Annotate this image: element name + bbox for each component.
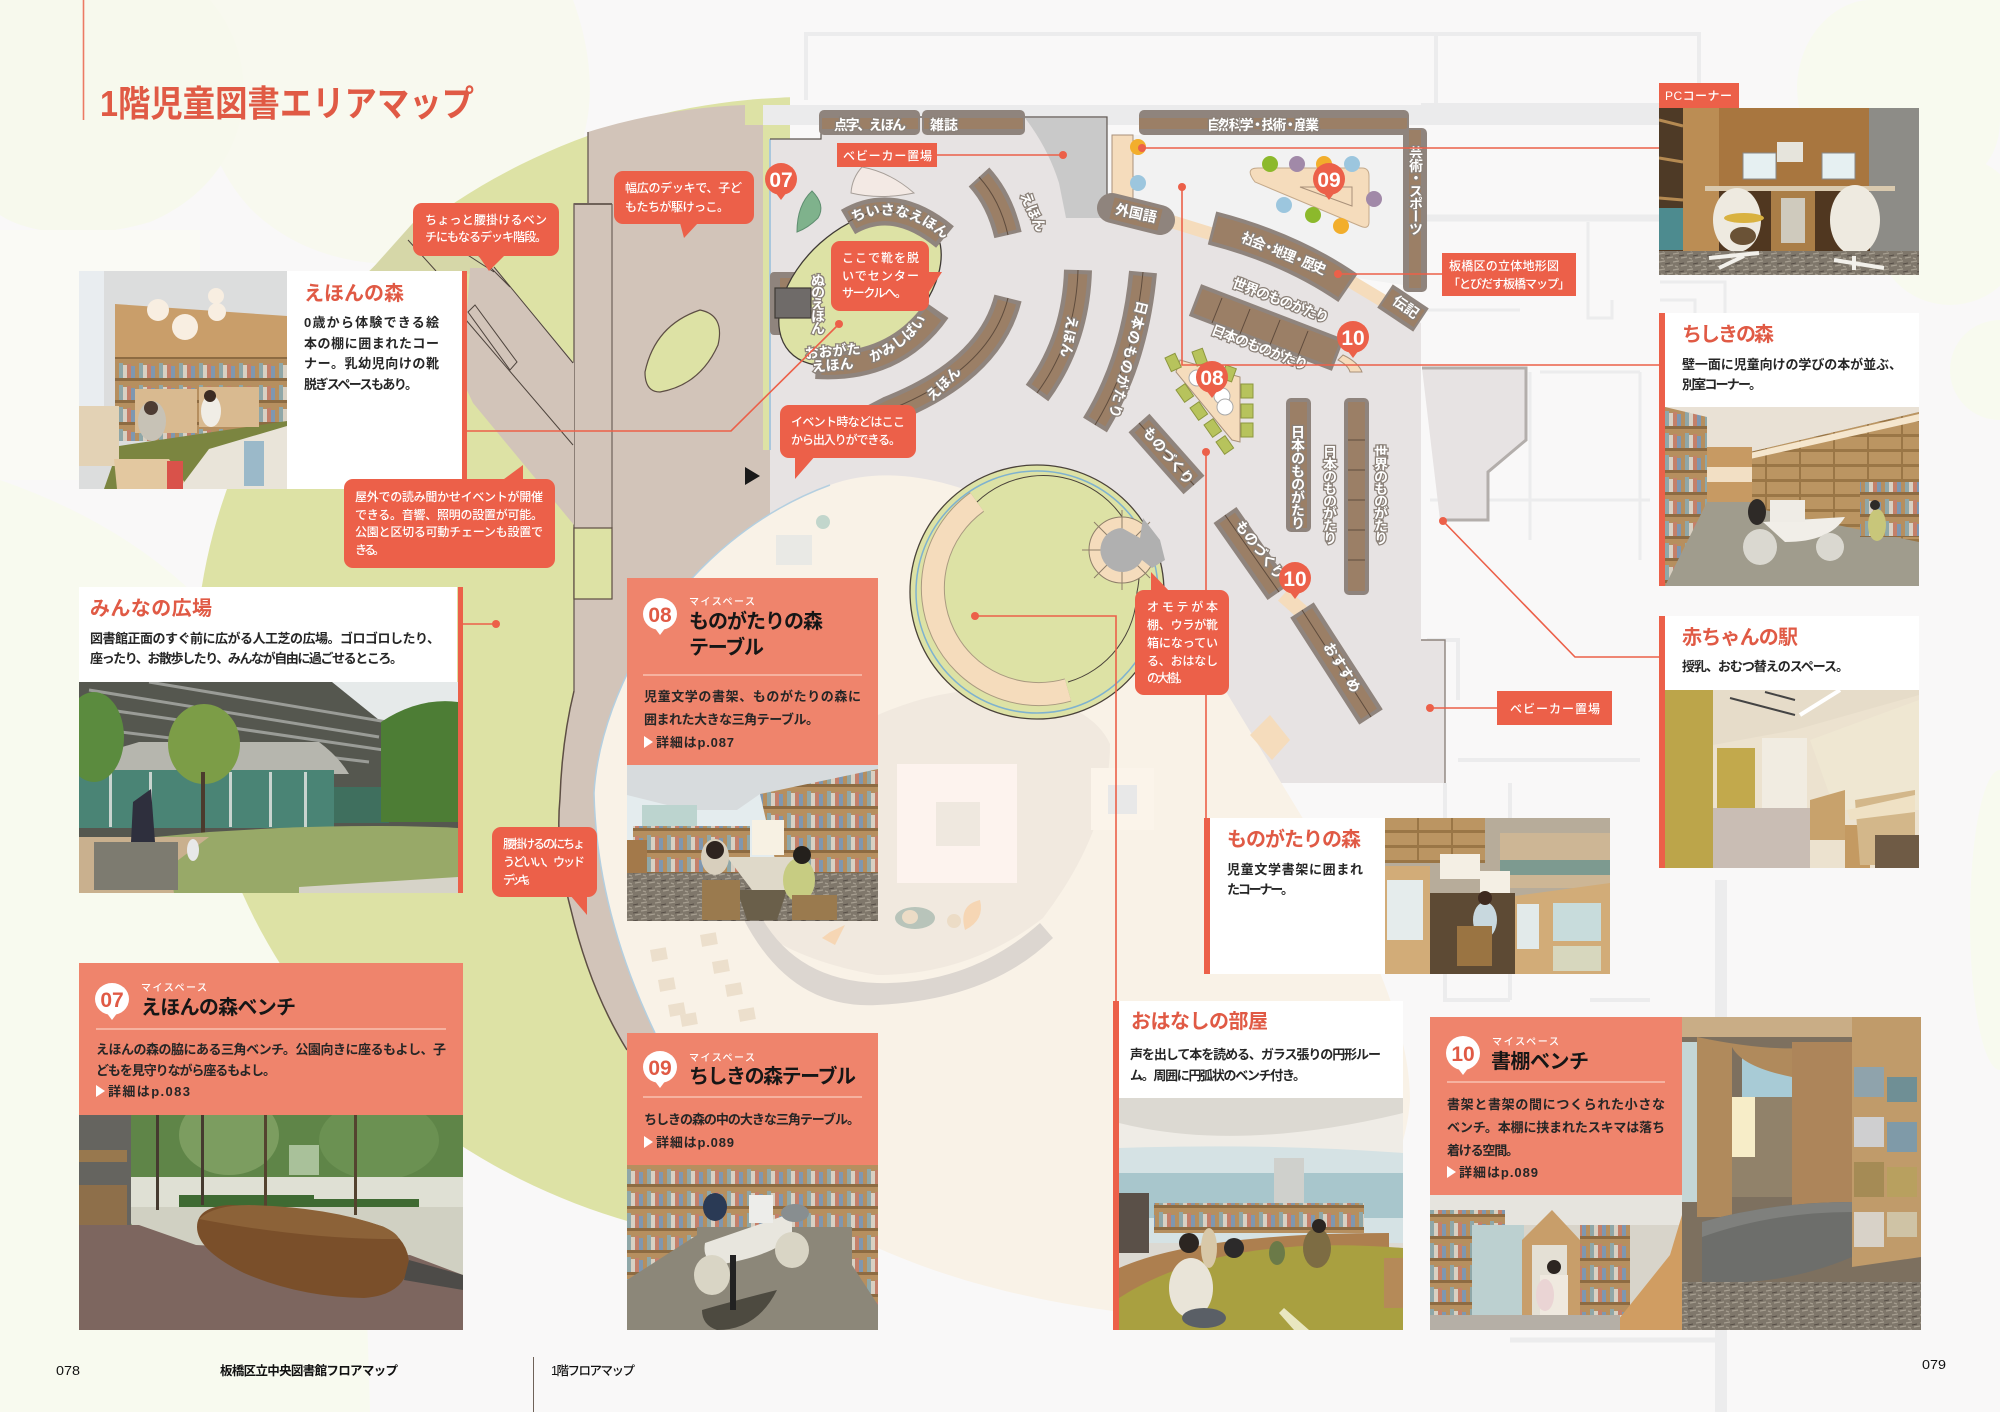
grass plaza — [202, 97, 790, 1221]
making shelf: ものづくり — [1140, 424, 1197, 488]
photo: baby station — [1665, 690, 1919, 868]
pin 10 upper — [1337, 321, 1369, 358]
callout: wood deck: うどいい、ウッド — [503, 855, 585, 869]
photo: PC corner — [1659, 108, 1919, 275]
callout: story tree — [1135, 572, 1229, 695]
picture-book forest: えほん — [811, 355, 854, 375]
callout: story tree: る、おはなし — [1147, 654, 1218, 668]
panel: My Space 08: テーブル — [689, 635, 764, 659]
panel: My Space 10: 詳細はp.089 — [1459, 1165, 1538, 1180]
panel: My Space 09: マイスペース — [689, 1052, 755, 1064]
panel: picture book forest: ナー。乳幼児向けの靴 — [304, 356, 439, 371]
panel: My Space 08: 詳細はp.087 — [656, 735, 734, 750]
callout: outdoor reading — [344, 465, 555, 568]
label: PC corner: PCコーナー — [1665, 89, 1732, 103]
panel: story forest: 児童文学書架に囲まれ — [1227, 862, 1363, 877]
pin 10 lower — [1279, 562, 1311, 599]
panel: picture book forest — [79, 271, 467, 489]
panel: My Space 09: ちしきの森の中の大きな三角テーブル。 — [644, 1112, 860, 1127]
picture-book forest: ぬのえほん — [810, 273, 826, 335]
label: terrain map: 「とびだす板橋マップ」 — [1448, 276, 1570, 291]
panel: My Space 10: 着ける空間。 — [1447, 1143, 1519, 1158]
callout: story tree: オモテが本 — [1147, 599, 1218, 614]
badge 08: 08 — [648, 604, 672, 627]
panel: story room: 声を出して本を読める、ガラス張りの円形ルー — [1130, 1047, 1381, 1062]
panel: story forest: ものがたりの森 — [1227, 827, 1361, 851]
badge 08 — [643, 598, 677, 635]
panel: My Space 08: マイスペース — [689, 596, 755, 608]
badge 07: 07 — [100, 989, 124, 1012]
callout: event entrance: から出入りができる。 — [791, 432, 901, 447]
label: stroller parking bottom — [1497, 691, 1612, 725]
panel: My Space 07: えほんの森ベンチ — [141, 996, 296, 1019]
floor map — [202, 97, 1528, 1311]
callout: outdoor reading: 屋外での読み聞かせイベントが開催 — [355, 489, 543, 504]
connector lines — [463, 144, 1660, 1001]
panel: My Space 07: えほんの森の脇にある三角ベンチ。公園向きに座るもよし、子 — [96, 1042, 446, 1057]
callout: story tree: の大樹。 — [1147, 670, 1189, 685]
panel: baby station: 授乳、おむつ替えのスペース。 — [1682, 659, 1849, 674]
photo: table 08 — [627, 765, 878, 921]
table 08 — [1165, 348, 1253, 454]
label: stroller parking top — [837, 143, 937, 167]
callout: wide deck: もたちが駆けっこ。 — [625, 199, 729, 214]
pin 08: 08 — [1200, 367, 1224, 390]
panel: story room: おはなしの部屋 — [1131, 1010, 1268, 1033]
vertical shelves — [1286, 398, 1389, 595]
callout: story tree: 棚、ウラが靴 — [1147, 617, 1218, 632]
panel: My Space 07 — [79, 963, 463, 1330]
panel: My Space 07: どもを見守りながら座るもよし。 — [96, 1063, 276, 1078]
panel: My Space 09: 詳細はp.089 — [656, 1135, 734, 1150]
callout: outdoor reading: きる。 — [355, 543, 385, 557]
panel: story room: ム。周囲に円弧状のベンチ付き。 — [1130, 1068, 1306, 1083]
picture-book forest: ちいさなえほん — [850, 202, 948, 238]
label: terrain map — [1442, 253, 1576, 296]
top shelves: 自然科学・技術・産業 — [1207, 117, 1319, 133]
panel: knowledge forest: 別室コーナー。 — [1682, 377, 1762, 392]
callout: outdoor reading: できる。音響、照明の設置が可能。 — [355, 507, 543, 522]
panel: My Space 07: マイスペース — [141, 982, 207, 994]
recommended shelf — [1225, 515, 1371, 717]
picture-book forest — [770, 167, 954, 380]
vertical shelves: 世界のものがたり — [1373, 445, 1389, 545]
photo: story forest — [1385, 818, 1610, 974]
vertical shelves: 日本のものがたり — [1322, 445, 1338, 545]
panel: story room — [1113, 1001, 1403, 1330]
diagonal shelf wall: 外国語 — [1114, 201, 1158, 225]
badge 09 — [643, 1051, 677, 1088]
callout: shoes off: いでセンター — [842, 269, 919, 283]
panel: everyone's plaza: 図書館正面のすぐ前に広がる人工芝の広場。ゴロゴロしたり、 — [90, 631, 440, 646]
panel: My Space 10: 書棚ベンチ — [1491, 1050, 1589, 1073]
panel: baby station: 赤ちゃんの駅 — [1682, 626, 1798, 649]
curved picture book shelves: えほん — [1017, 190, 1050, 234]
panel: My Space 10: ベンチ。本棚に挟まれたスキマは落ち — [1447, 1120, 1665, 1135]
photo: shelf bench — [1682, 1017, 1921, 1330]
callout: shoes off: ここで靴を脱 — [842, 250, 919, 265]
world stories shelf — [1195, 275, 1362, 373]
panel: My Space 10: マイスペース — [1492, 1036, 1559, 1048]
badge 10: 10 — [1451, 1043, 1475, 1066]
recommended shelf: おすすめ — [1321, 639, 1364, 695]
label: terrain map: 板橋区の立体地形図 — [1449, 258, 1559, 273]
panel: My Space 08: 囲まれた大きな三角テーブル。 — [644, 712, 819, 727]
callout: shoes off — [831, 241, 942, 311]
callout: deck stairs: チにもなるデッキ階段。 — [425, 229, 547, 244]
pin 07: 07 — [769, 169, 793, 192]
badge 07 — [95, 983, 129, 1020]
panel: My Space 10 — [1430, 1017, 1921, 1330]
panel: My Space 10: 書架と書架の間につくられた小さな — [1447, 1097, 1665, 1112]
callout: story tree: 箱になってい — [1147, 635, 1218, 650]
vertical shelves: 日本のものがたり — [1290, 425, 1306, 530]
panel: knowledge forest: 壁一面に児童向けの学びの本が並ぶ、 — [1682, 357, 1902, 372]
photo: knowledge forest — [1665, 407, 1919, 586]
panel: picture book forest: 脱ぎスペースもあり。 — [304, 377, 418, 392]
photo: plaza — [79, 682, 458, 893]
panel: story forest — [1204, 818, 1610, 974]
footer — [56, 1357, 1946, 1412]
footer: 079 — [1922, 1358, 1946, 1372]
pin 10 lower: 10 — [1283, 568, 1307, 591]
picture-book forest: おおがた — [804, 341, 861, 361]
photo: story room — [1119, 1098, 1403, 1330]
footer: 1階フロアマップ — [551, 1364, 635, 1378]
panel: baby station — [1659, 616, 1919, 868]
diagonal shelf wall: 社会・地理・歴史 — [1239, 229, 1329, 278]
callout: wood deck: デッキ。 — [503, 872, 537, 887]
cream lawn circle — [594, 475, 1410, 1311]
story room circle — [910, 465, 1165, 719]
entrance marker — [745, 467, 760, 485]
recommended shelf: ものづくり — [1232, 517, 1288, 582]
label: stroller parking top: ベビーカー置場 — [843, 149, 932, 163]
badge 09: 09 — [648, 1057, 672, 1080]
panel: everyone's plaza: みんなの広場 — [90, 597, 212, 620]
building floor — [763, 105, 1526, 783]
footer: 板橋区立中央図書館フロアマップ — [220, 1363, 398, 1378]
curved picture book shelves: 日本のものがたり — [1106, 299, 1151, 420]
deck stairs — [370, 215, 574, 525]
top shelves: 芸術・スポーツ — [1408, 145, 1424, 236]
panel: picture book forest: えほんの森 — [304, 282, 404, 305]
callout: event entrance — [780, 405, 916, 479]
callout: outdoor reading: 公園と区切る可動チェーンも設置で — [355, 524, 543, 539]
panel: picture book forest: 0歳から体験できる絵 — [304, 315, 439, 330]
title: 1階児童図書エリアマップ — [100, 83, 474, 124]
photo: table 09 — [627, 1165, 878, 1330]
callout: wide deck — [614, 171, 754, 238]
pin 08 — [1196, 361, 1228, 398]
callout: wood deck — [492, 827, 597, 915]
diagonal shelf wall: 伝記 — [1390, 292, 1422, 321]
pin 10 upper: 10 — [1341, 327, 1365, 350]
panel: My Space 08: ものがたりの森 — [689, 609, 823, 633]
callout: shoes off: サークルへ。 — [842, 286, 907, 300]
curved picture book shelves: えほん — [923, 363, 964, 404]
callout: wide deck: 幅広のデッキで、子ど — [625, 180, 742, 195]
world stories shelf: 世界のものがたり — [1230, 275, 1331, 326]
panel: My Space 08 — [627, 578, 878, 921]
curved picture book shelves: えほん — [1058, 314, 1081, 359]
photo: picture book forest — [79, 271, 287, 489]
top shelves: 雑誌 — [930, 117, 958, 133]
table 09 room — [1112, 135, 1382, 234]
label: stroller parking bottom: ベビーカー置場 — [1510, 702, 1600, 716]
callout: deck stairs: ちょっと腰掛けるベン — [425, 212, 547, 227]
panel: My Space 08: 児童文学の書架、ものがたりの森に — [644, 689, 861, 704]
panel: everyone's plaza — [64, 587, 463, 893]
callout: event entrance: イベント時などはここ — [791, 414, 905, 429]
diagonal shelf wall — [1112, 201, 1422, 321]
world stories shelf: 日本のものがたり — [1209, 322, 1310, 373]
pin 07 — [765, 163, 797, 200]
panel: everyone's plaza: 座ったり、お散歩したり、みんなが自由に過ごせるところ。 — [90, 651, 403, 666]
wooden deck — [559, 105, 780, 1100]
pin 09 — [1313, 163, 1345, 200]
panel: knowledge forest — [1659, 313, 1919, 586]
picture-book forest: かみしばい — [868, 316, 926, 363]
panel: My Space 07: 詳細はp.083 — [108, 1084, 190, 1099]
photo: bench — [79, 1115, 463, 1330]
top shelves — [819, 110, 1427, 292]
panel: My Space 09 — [627, 1033, 878, 1330]
pin 09: 09 — [1317, 169, 1341, 192]
label: PC corner — [1659, 83, 1739, 108]
badge 10 — [1446, 1036, 1480, 1075]
curved picture book shelves — [860, 177, 1151, 425]
callout: deck stairs — [413, 203, 559, 271]
photo: shelf display — [1430, 1195, 1682, 1330]
top shelves: 点字、えほん — [834, 117, 906, 133]
panel: story forest: たコーナー。 — [1227, 882, 1294, 897]
callout: wood deck: 腰掛けるのにちょ — [503, 836, 585, 851]
panel: picture book forest: 本の棚に囲まれたコー — [304, 336, 439, 351]
footer: 078 — [56, 1364, 80, 1378]
panel: My Space 09: ちしきの森テーブル — [689, 1064, 856, 1088]
panel: knowledge forest: ちしきの森 — [1682, 323, 1774, 346]
